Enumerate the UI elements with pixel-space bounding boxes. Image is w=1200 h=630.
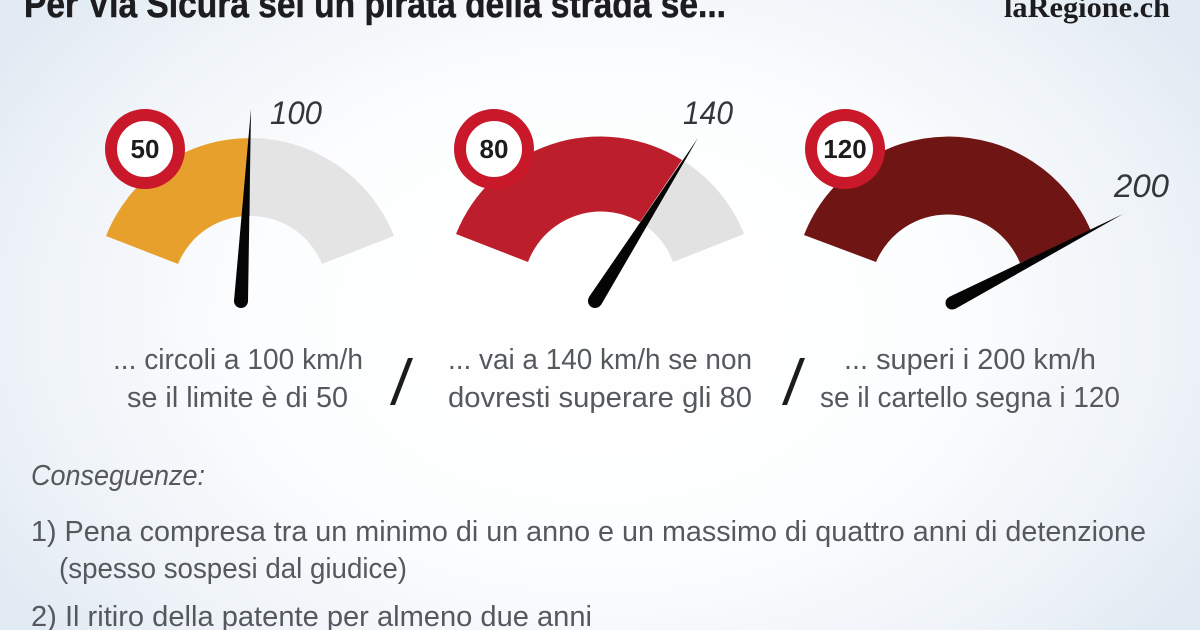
gauge arc: excess range [640, 160, 744, 262]
caption: limit 120: ... superi i 200 km/h [844, 344, 1096, 376]
gauge arc: reached range [106, 138, 250, 264]
gauge: limit 120, speed 200 [804, 115, 1169, 310]
caption: limit 50: ... circoli a 100 km/h [113, 344, 363, 376]
caption: limit 120 [820, 344, 1120, 414]
speed limit sign: 50 [111, 115, 179, 183]
needle [946, 214, 1123, 310]
gauge arc: reached range [804, 137, 1091, 263]
needle [234, 109, 251, 308]
gauge: limit 50, speed 100 [106, 95, 394, 308]
speed limit sign: 80: 80 [480, 134, 508, 164]
speed limit sign: 80 [460, 115, 528, 183]
caption: limit 80: ... vai a 140 km/h se non [448, 344, 752, 376]
gauge arc: reached range [456, 136, 682, 262]
slash separator [390, 358, 413, 405]
caption: limit 50: se il limite è di 50 [127, 382, 348, 414]
caption: limit 120: se il cartello segna i 120 [820, 382, 1120, 414]
caption: limit 80 [448, 344, 752, 414]
consequence 1: 1) Pena compresa tra un minimo di un anno e un massimo di quattro anni di detenzione [31, 516, 1146, 548]
needle [588, 138, 698, 308]
slash separator [782, 358, 805, 405]
heading: consequences: Conseguenze: [31, 460, 205, 492]
gauge arc: excess range [250, 138, 394, 264]
speed label: 100: 100 [270, 95, 322, 131]
caption: limit 80: dovresti superare gli 80 [448, 382, 752, 414]
caption: limit 50 [113, 344, 363, 414]
consequence 1: (spesso sospesi dal giudice) [59, 553, 407, 585]
speed label: 140: 140 [683, 95, 733, 131]
speed label: 200: 200 [1113, 168, 1169, 204]
gauge: limit 80, speed 140 [456, 95, 744, 308]
speed limit sign: 50: 50 [131, 134, 159, 164]
consequence 1 [31, 516, 1146, 585]
speed limit sign: 120: 120 [823, 134, 867, 164]
speed limit sign: 120 [811, 115, 879, 183]
